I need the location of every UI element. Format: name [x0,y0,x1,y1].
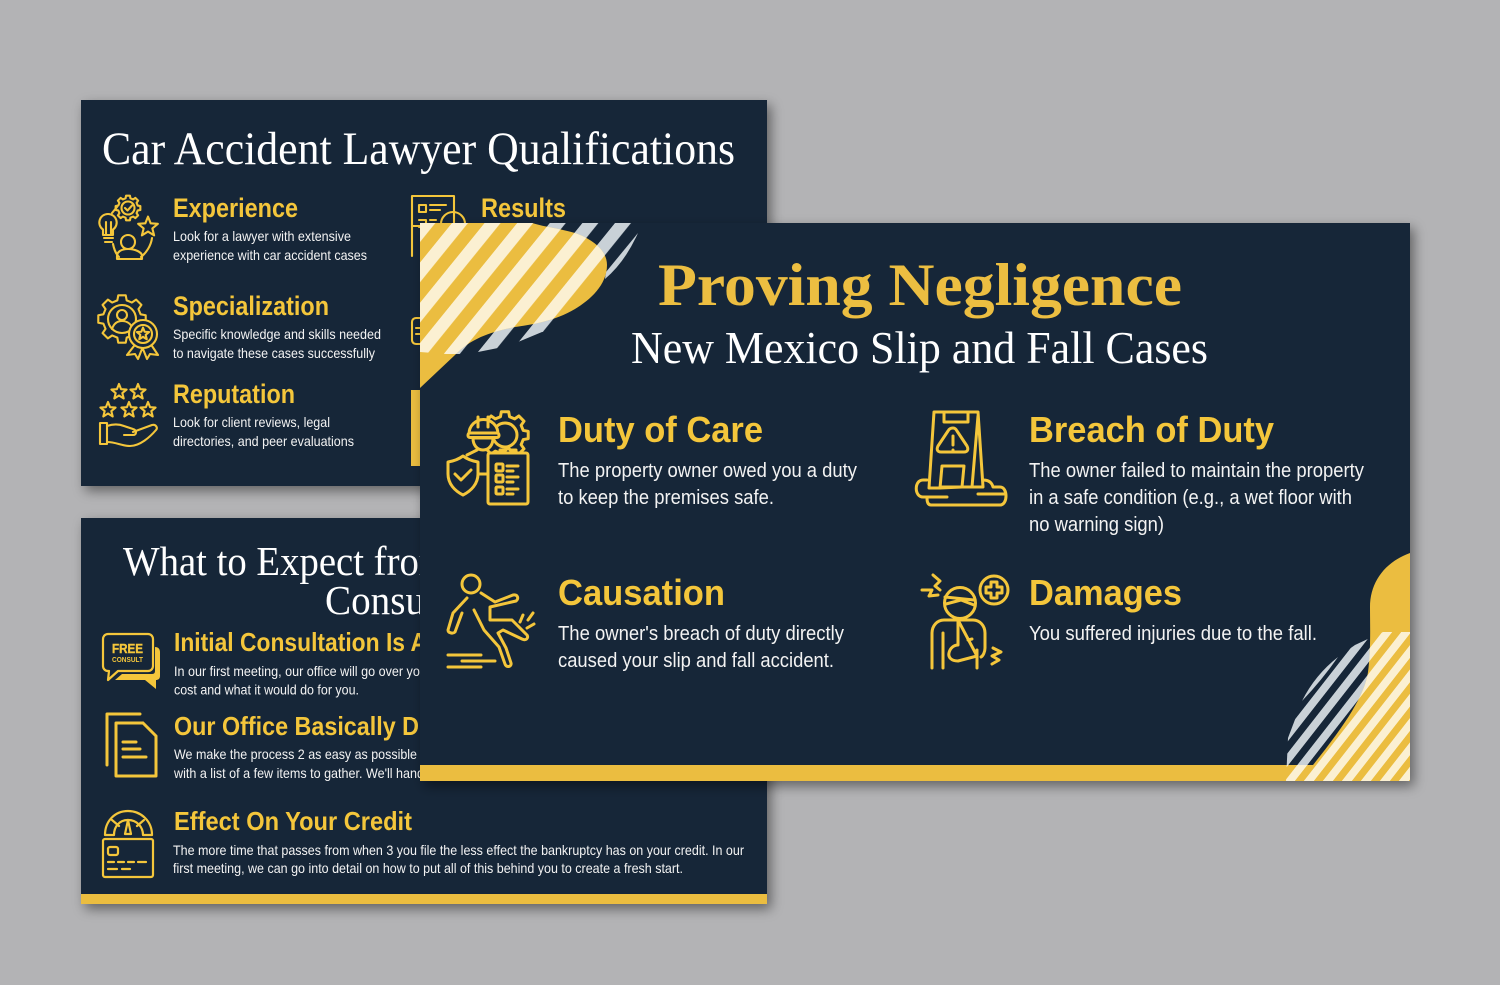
text: duty of care: to keep the premises safe. [558,487,774,509]
text: reputation description [173,414,354,449]
text: experience description [173,228,367,263]
text: initial consultation description: cost and what it would do for you. [174,682,359,698]
text: damages: You suffered injuries due to the fall. [1029,623,1317,645]
icon: free consult bubbles [103,634,160,689]
icon: results [412,196,465,256]
icon: documents [107,714,156,776]
text: initial consultation description [174,663,431,698]
bottom accent bar [81,894,767,904]
panel: what to expect from consultation [81,518,767,904]
bottom accent bar [420,765,1410,781]
heading: specialization: Specialization [173,291,329,321]
text: causation: caused your slip and fall accident. [558,650,834,672]
text: breach of duty [1029,460,1364,536]
icon: free consult bubbles: FREE [112,641,143,656]
text: office description: with a list of a few items to gather. We'll hand [173,765,424,781]
text: reputation description: Look for client reviews, legal [173,414,330,430]
title: what to expect: What to Expect from [123,538,449,584]
icon: falling person [448,575,534,667]
title: proving negligence: Proving Negligence [658,252,1182,318]
text: credit description [173,842,744,876]
text: specialization description: Specific knowledge and skills needed [173,326,381,342]
text: experience description: Look for a lawyer with extensive [173,228,351,244]
heading: results: Results [481,193,566,223]
top-left striped blob [420,223,650,388]
text: credit description: The more time that passes from when 3 you file the less effect the bankruptcy has on your credit. In our [173,842,744,858]
icon: partly hidden checklist [412,318,420,344]
heading: credit: Effect On Your Credit [174,806,412,836]
yellow side block [411,390,423,466]
text: credit description: first meeting, we can go into detail on how to put all of this behind you to create a fresh start. [173,860,683,876]
heading: office: Our Office Basically D [174,711,419,741]
icon: free consult bubbles: CONSULT [112,655,143,664]
heading: causation: Causation [558,572,725,613]
title: what to expect: Consultation [325,577,525,623]
text: initial consultation description: In our first meeting, our office will go over your [174,663,431,679]
bottom-right striped blob [1280,553,1410,781]
panel: car accident lawyer qualifications [81,100,767,486]
text: duty of care [558,460,857,509]
icon: credit gauge and card [103,811,153,877]
text: specialization description: to navigate these cases successfully [173,345,375,361]
title: car accident lawyer qualifications: Car Accident Lawyer Qualifications [102,123,735,175]
text: breach of duty: in a safe condition (e.g., a wet floor with [1029,487,1352,509]
title: what to expect [123,538,525,623]
text: office description: We make the process 2 as easy as possible [174,746,417,762]
icon: wet floor sign [916,412,1006,505]
heading: duty of care: Duty of Care [558,409,763,450]
heading: reputation: Reputation [173,379,295,409]
text: specialization description [173,326,381,361]
text: breach of duty: no warning sign) [1029,514,1164,536]
text: office description [173,746,424,781]
subtitle: New Mexico Slip and Fall Cases [631,322,1208,373]
text: duty of care: The property owner owed you a duty [558,460,857,482]
text: reputation description: directories, and peer evaluations [173,433,354,449]
text: causation [558,623,844,672]
heading: breach of duty: Breach of Duty [1029,409,1274,450]
text: causation: The owner's breach of duty directly [558,623,844,645]
icon: experience [99,196,158,259]
text: experience description: experience with car accident cases [173,247,367,263]
heading: damages: Damages [1029,572,1182,613]
icon: reputation [100,384,157,446]
heading: initial consultation: Initial Consultation Is A [174,627,427,657]
panel: proving negligence [420,223,1410,781]
icon: specialization [98,295,158,359]
icon: duty of care [448,412,528,504]
icon: injured person [922,575,1008,668]
text: breach of duty: The owner failed to maintain the property [1029,460,1364,482]
heading: experience: Experience [173,193,298,223]
